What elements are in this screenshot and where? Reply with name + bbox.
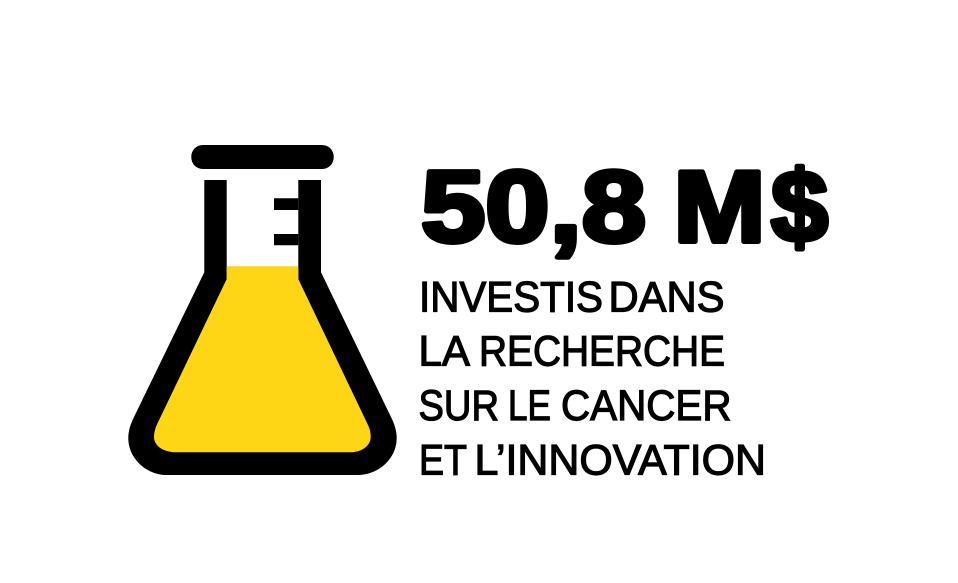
line 4: ET	[419, 437, 467, 484]
flask cap	[191, 145, 334, 169]
text block: description	[418, 275, 766, 484]
heading: amount: 50,8	[421, 152, 646, 264]
line 3: SUR	[418, 383, 499, 430]
flask body outline	[128, 180, 397, 475]
heading: amount: M	[674, 152, 766, 264]
flask yellow liquid	[154, 266, 371, 452]
line 3: LE	[508, 383, 551, 430]
line 3: CANCER	[561, 383, 732, 430]
line 1: DANS	[608, 275, 724, 322]
line 2: RECHERCHE	[479, 329, 725, 376]
line 1: INVESTIS	[419, 275, 603, 322]
icon: flask	[128, 145, 397, 475]
line 2: LA	[418, 329, 471, 376]
heading: amount: $	[771, 152, 828, 264]
line 4: L’INNOVATION	[474, 437, 766, 484]
flask measurement ticks	[274, 198, 298, 245]
